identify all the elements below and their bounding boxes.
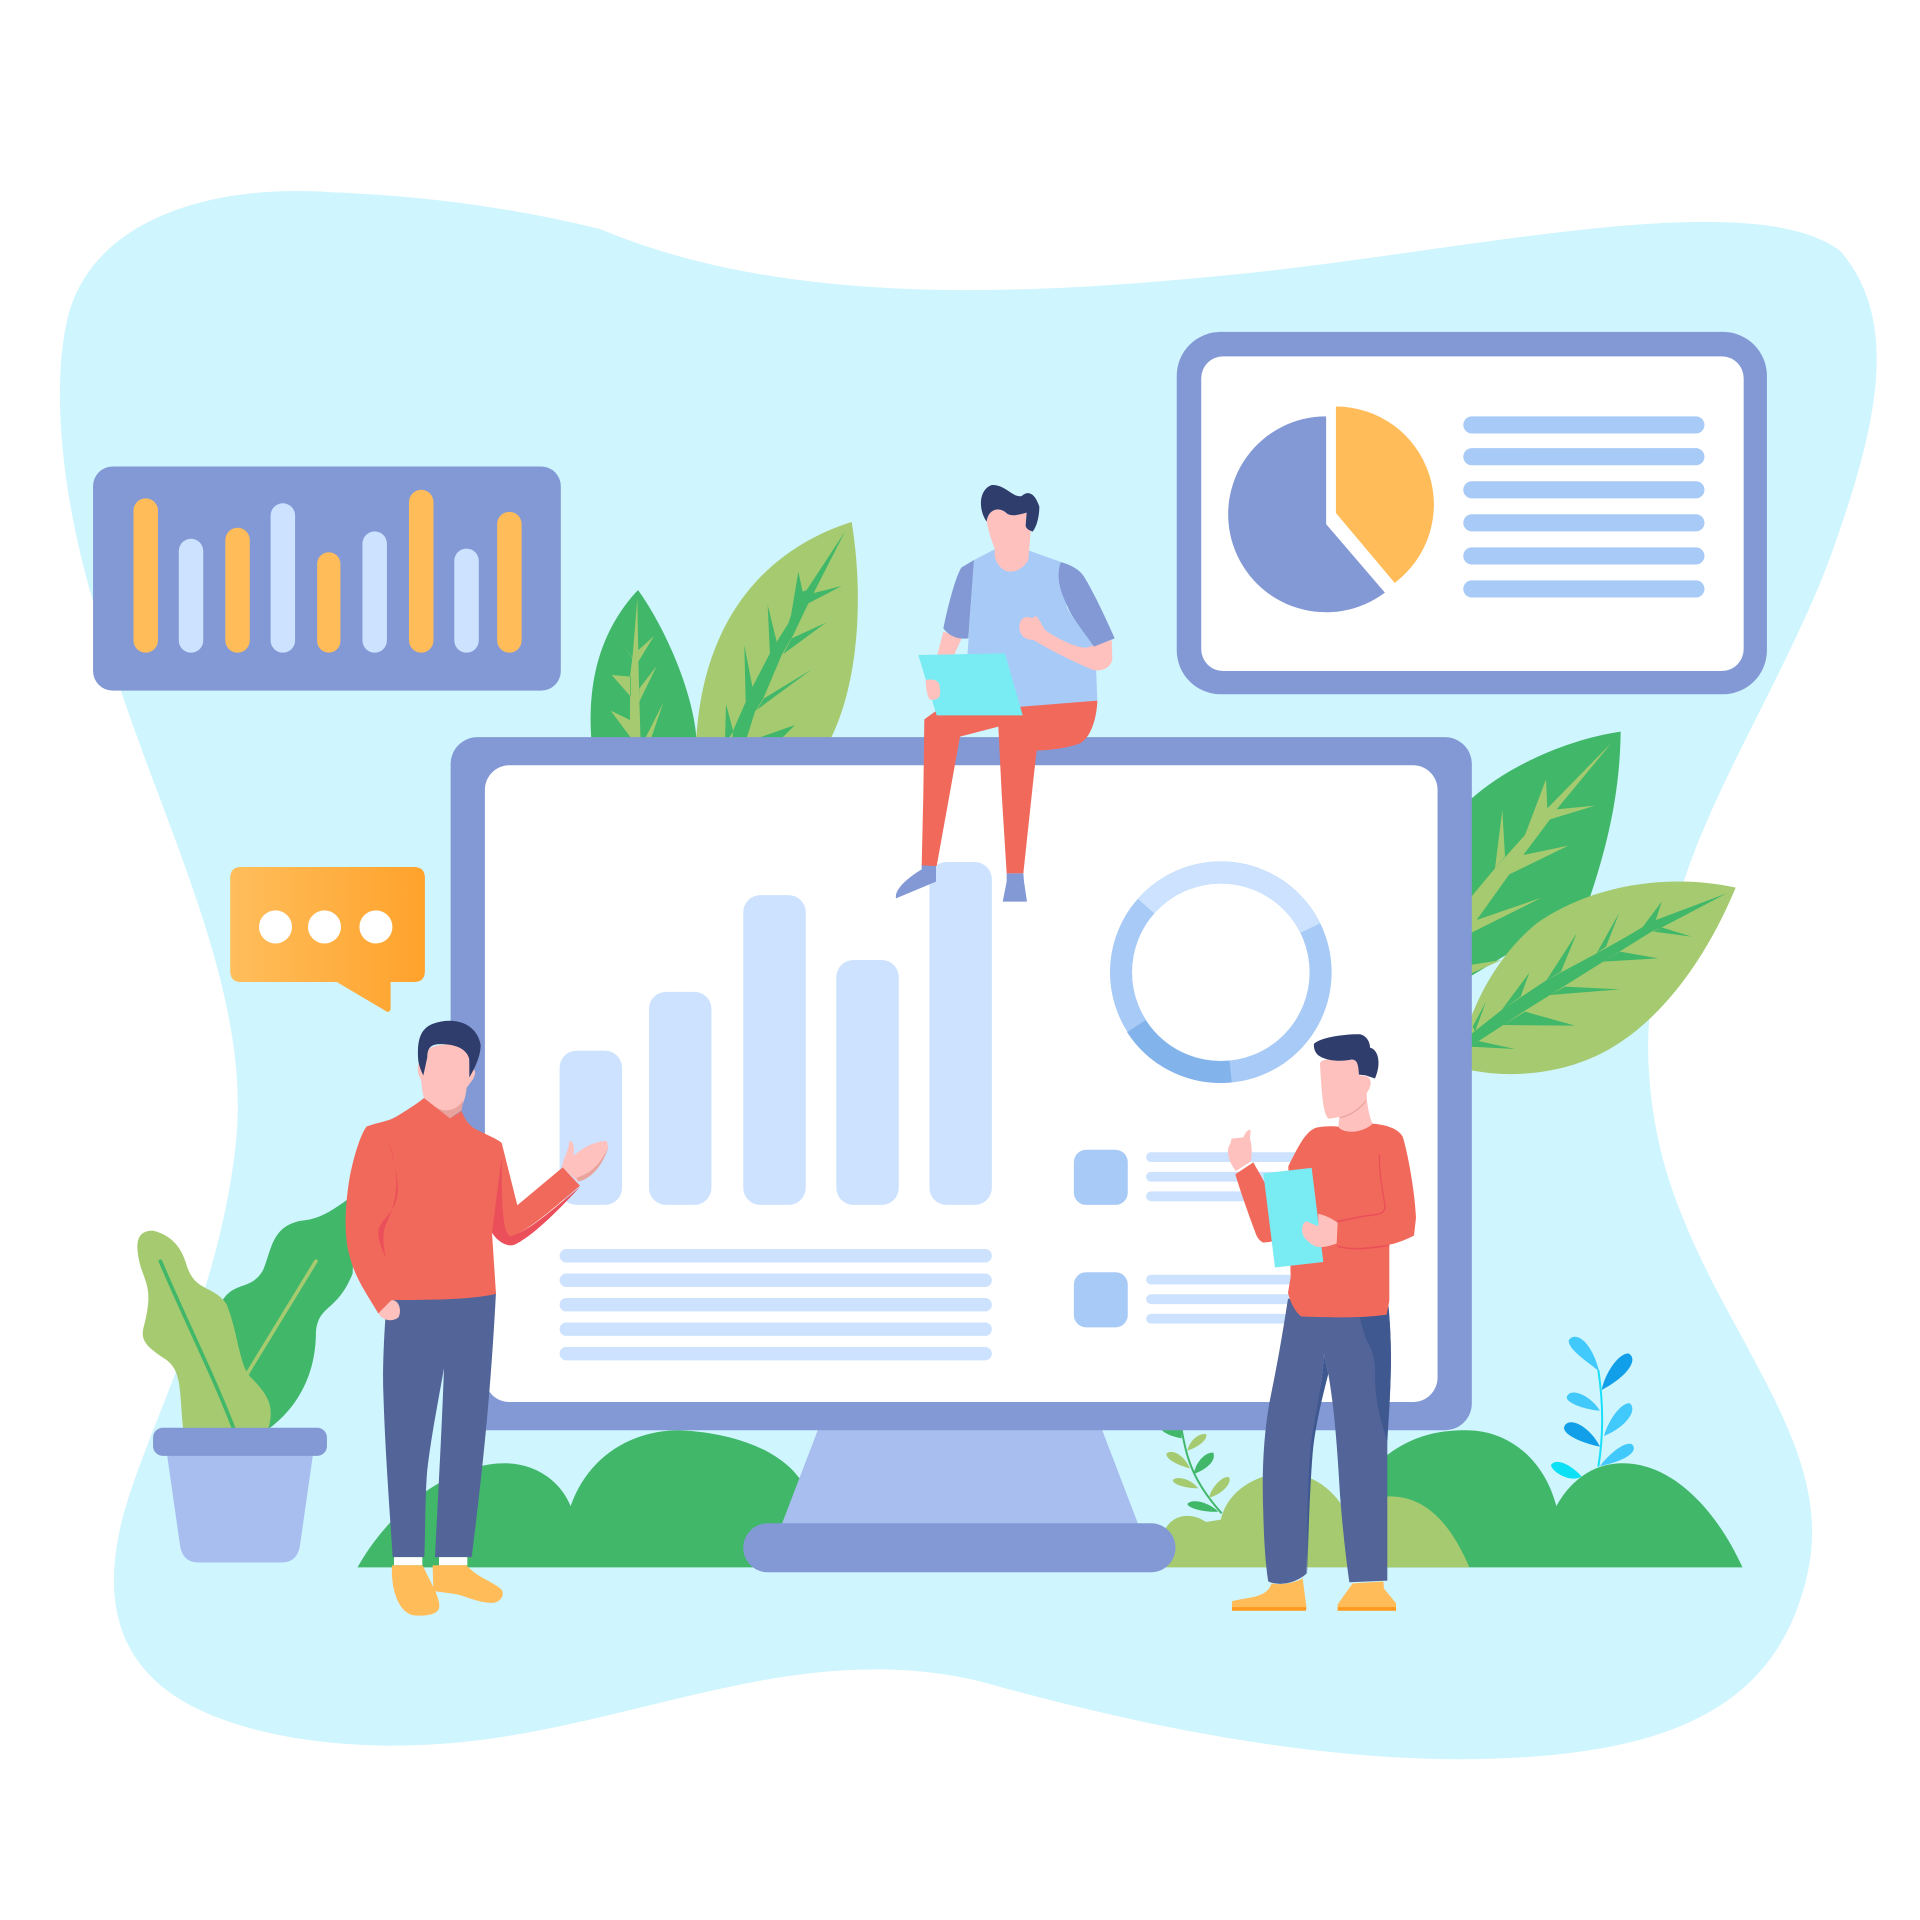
monitor screen — [451, 737, 1472, 1430]
small plant: blue — [1551, 1337, 1634, 1479]
bush: right — [1378, 1430, 1742, 1567]
bar chart panel — [93, 467, 561, 691]
legend — [1074, 1150, 1305, 1327]
bush: left — [358, 1430, 803, 1567]
leaf: right dark behind monitor — [1470, 732, 1621, 977]
pie chart panel — [1177, 332, 1767, 694]
small plant: centre — [1162, 1430, 1230, 1513]
monitor stand — [781, 1427, 1139, 1526]
screen bar chart — [560, 862, 992, 1205]
leaf: right light behind monitor — [1470, 881, 1736, 1074]
person: sitting on monitor — [896, 485, 1115, 902]
screen text lines — [560, 1249, 992, 1360]
chat bubble — [230, 867, 425, 1012]
background blob — [60, 191, 1877, 1759]
person: standing left — [346, 1021, 608, 1616]
bush: light centre — [1161, 1473, 1469, 1567]
person: standing right — [1228, 1034, 1416, 1611]
leaf: small dark behind monitor — [591, 590, 697, 743]
leaf: large light behind monitor — [696, 522, 858, 743]
monitor base — [743, 1523, 1176, 1572]
potted plant — [137, 1194, 355, 1562]
donut chart — [1121, 872, 1321, 1072]
